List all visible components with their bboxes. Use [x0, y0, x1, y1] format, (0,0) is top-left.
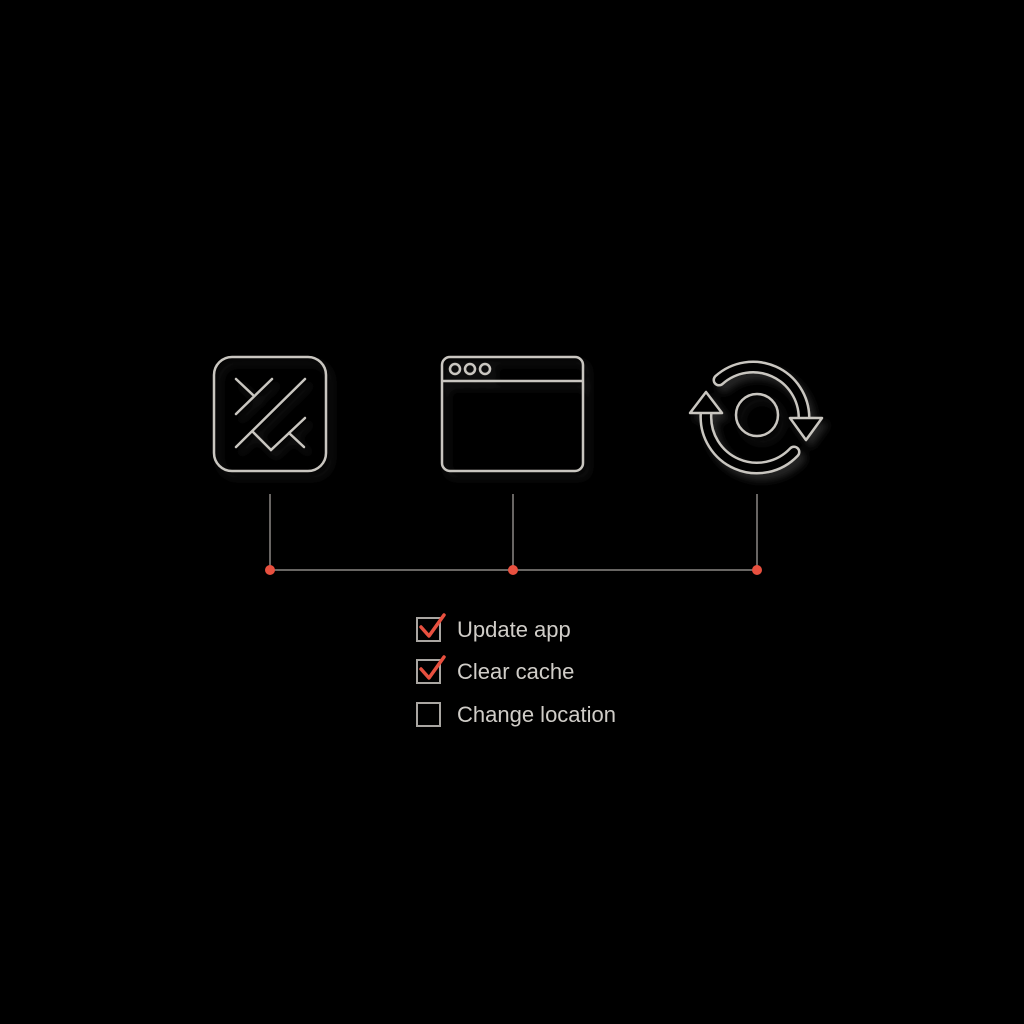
checklist: [417, 615, 616, 727]
checklist: Clear cache: [457, 659, 574, 684]
checklist: Update app: [457, 617, 571, 642]
icon: app tile: [214, 357, 326, 471]
icon: browser window: [442, 357, 583, 471]
checklist: Change location: [457, 702, 616, 727]
icon: refresh: [690, 367, 822, 468]
timeline connector: [265, 494, 762, 575]
